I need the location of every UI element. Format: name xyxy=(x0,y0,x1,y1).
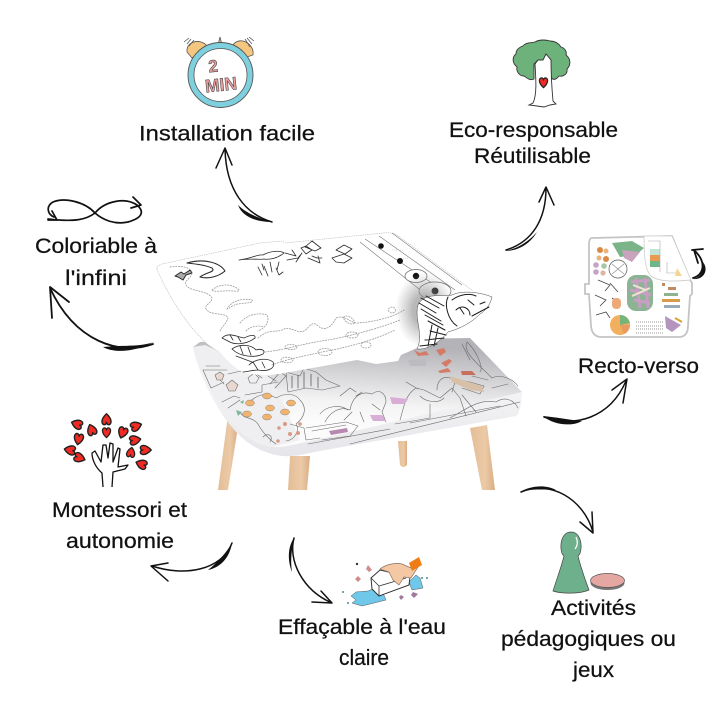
table top with colouring print xyxy=(193,338,522,456)
arrow xyxy=(543,379,627,424)
icon: double-sided sheet xyxy=(585,236,706,337)
icon: alarm clock 2 min: 2 xyxy=(207,56,219,76)
arrow xyxy=(505,187,554,251)
label line 3: jeux xyxy=(572,659,615,682)
label: Activités xyxy=(551,597,636,620)
label: Eco-responsable xyxy=(449,119,618,142)
small flip arrow xyxy=(692,249,706,279)
table legs xyxy=(218,415,495,490)
feature: Montessori et autonomie xyxy=(52,414,232,581)
label line 2: claire xyxy=(339,645,389,670)
label: Montessori et xyxy=(52,499,187,522)
label: Recto-verso xyxy=(578,355,699,378)
icon: alarm clock 2 min xyxy=(184,37,254,108)
curl shadow xyxy=(395,272,455,348)
feature: Coloriable à l'infini xyxy=(35,197,157,351)
label: Coloriable à xyxy=(35,235,157,258)
arrow xyxy=(289,538,332,603)
strip with black dots xyxy=(360,233,462,300)
feature: Activités pédagogiques ou jeux xyxy=(501,486,676,682)
label line 2: l'infini xyxy=(65,267,127,290)
feature: Recto-verso xyxy=(543,236,706,424)
label: Installation facile xyxy=(139,122,315,146)
arrow xyxy=(520,486,593,533)
icon: hand tree with hearts xyxy=(64,414,151,487)
arrow xyxy=(151,543,232,581)
central table illustration xyxy=(157,233,522,490)
feature: Installation facile xyxy=(139,37,315,222)
feature: Eco-responsable Réutilisable xyxy=(449,40,618,251)
print line art xyxy=(203,342,520,444)
coloured details xyxy=(236,348,484,443)
curled corner with unicorn print xyxy=(417,292,492,349)
icon: eraser and water xyxy=(342,557,428,606)
label line 2: Réutilisable xyxy=(474,145,591,168)
label line 2: autonomie xyxy=(66,530,174,553)
label line 2: pédagogiques ou xyxy=(501,628,676,651)
moons and animal line art xyxy=(175,241,352,372)
arrow xyxy=(50,287,154,351)
icon: infinity arrow xyxy=(48,197,141,223)
icon: game pawn and token xyxy=(553,532,624,593)
feature: Effaçable à l'eau claire xyxy=(278,538,446,670)
arrow xyxy=(216,148,272,222)
label: Effaçable à l'eau xyxy=(278,616,446,639)
icon: alarm clock 2 min: MIN xyxy=(204,73,238,97)
dotted tracing lines xyxy=(170,266,404,365)
top removable sheet xyxy=(157,233,492,375)
icon: tree with heart xyxy=(513,40,570,107)
